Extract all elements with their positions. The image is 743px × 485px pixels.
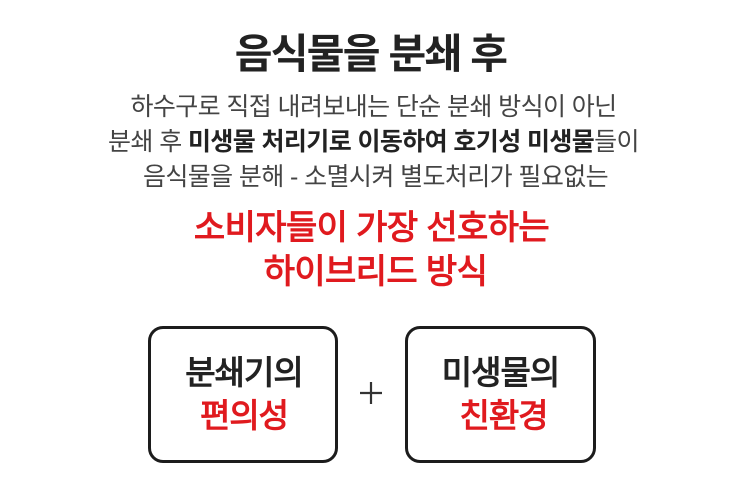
panel text: eco-friendliness: 친환경	[459, 397, 548, 434]
title: 음식물을 분쇄 후	[235, 31, 506, 77]
red highlight heading: 하이브리드 방식	[264, 253, 487, 291]
panel: grinder convenience	[148, 326, 338, 463]
plus icon	[360, 382, 382, 404]
red highlight heading	[194, 209, 549, 291]
panel: microbe eco-friendliness	[405, 326, 596, 463]
description text: 분쇄 후 미생물 처리기로 이동하여 호기성 미생물들이	[108, 128, 639, 156]
description text: 하수구로 직접 내려보내는 단순 분쇄 방식이 아닌	[130, 93, 617, 121]
description text: 음식물을 분해 - 소멸시켜 별도처리가 필요없는	[143, 163, 608, 191]
red highlight heading: 소비자들이 가장 선호하는	[194, 209, 549, 247]
panel text: convenience: 편의성	[200, 397, 288, 434]
panel text: microbes: 미생물의	[442, 354, 559, 391]
description text	[108, 93, 639, 191]
panel text: grinder: 분쇄기의	[185, 354, 303, 391]
